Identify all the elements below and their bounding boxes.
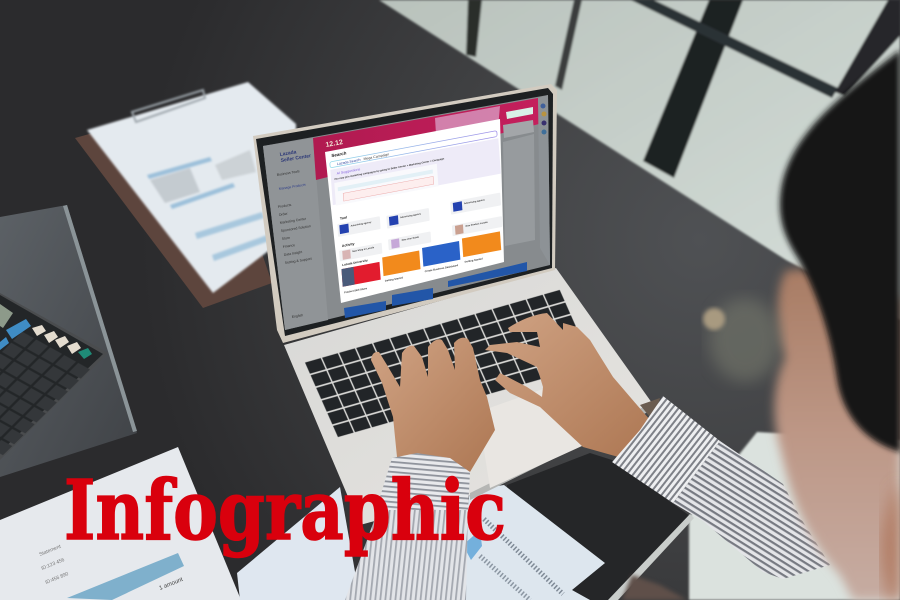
paper bottom left: 1 amount [159, 577, 184, 592]
clipboard with paper [75, 82, 296, 308]
sidebar: Setting & Support [285, 257, 312, 265]
title: Infographic [64, 463, 506, 559]
search modal: Search [331, 150, 347, 158]
dark desk near bottom [507, 453, 690, 600]
activity cards: New User Guide [402, 236, 420, 242]
sidebar: Store [282, 236, 290, 241]
right strip [538, 95, 550, 265]
activity cards: New Product Lazada [466, 221, 488, 228]
sidebar: English [292, 313, 303, 319]
tool cards: Advertising agency [400, 212, 422, 219]
sidebar: Data Insight [284, 250, 302, 257]
background blue buttons [344, 301, 386, 318]
right hand [485, 313, 650, 458]
sidebar [263, 138, 328, 330]
glasses [709, 298, 781, 382]
sidebar: Sponsored Solution [281, 224, 311, 233]
activity cards: New Shop in Lazada [352, 247, 375, 253]
watch [640, 398, 660, 422]
sidebar: Business Tools [277, 169, 300, 177]
keyboard [304, 289, 594, 438]
laptop [253, 84, 652, 525]
search modal: Lazada Search [337, 158, 361, 166]
background cards [503, 120, 534, 138]
screen [263, 95, 550, 330]
person in foreground [703, 50, 900, 600]
AI suggestions panel: You may join marketing campaigns by going to Seller Center > Marketing Center > Campaign [334, 157, 445, 181]
sidebar: Order [279, 211, 289, 217]
desk edge and laptop corner [608, 514, 694, 600]
banner cards [341, 231, 502, 295]
banner cards: Product Skill Share [344, 287, 368, 294]
sidebar: Seller Center [280, 153, 312, 164]
search modal: Activity [342, 242, 355, 248]
notebook under calculator [0, 205, 137, 477]
window posts [643, 0, 743, 178]
laptop lid [253, 84, 557, 343]
pink banner: 12.12 [325, 139, 344, 149]
tool cards: Advertising agency [464, 198, 486, 205]
tool cards [337, 193, 501, 238]
left shirt sleeve [345, 453, 470, 600]
left hand [371, 338, 495, 472]
search modal [325, 119, 507, 303]
calculator [0, 293, 108, 465]
sidebar: Finance [283, 243, 295, 249]
paper bottom left: ID:123 456 [41, 557, 66, 572]
calculator keys [0, 332, 90, 455]
paper bottom left: Statement [39, 544, 62, 558]
paper bottom right [455, 485, 605, 600]
paper bottom center [237, 487, 360, 600]
activity cards [339, 216, 503, 261]
tool cards: Advertising agency [350, 221, 372, 228]
AI suggestions panel: AI Suggestions [337, 167, 361, 176]
touchpad [478, 376, 628, 488]
search modal: Mega Campaign [363, 152, 389, 161]
sidebar: Marketing Center [280, 217, 307, 225]
banner cards: Getting Started [385, 276, 404, 283]
search modal: Tool [340, 215, 347, 221]
paper bottom left: ID:456 890 [45, 571, 70, 586]
right shirt sleeve [612, 396, 830, 579]
sidebar: Manage Products [279, 183, 306, 191]
laptop base [284, 268, 652, 525]
banner cards: Getting Started [465, 257, 483, 264]
AI suggestions panel [330, 138, 501, 206]
search modal: Lazada University [342, 258, 368, 267]
pink banner [313, 98, 539, 180]
sidebar: Products [278, 203, 292, 209]
banner cards: Create Business Dashboard [425, 264, 459, 273]
window background [379, 0, 900, 600]
sidebar: Lazada [279, 149, 297, 158]
paper bottom left [0, 447, 241, 600]
